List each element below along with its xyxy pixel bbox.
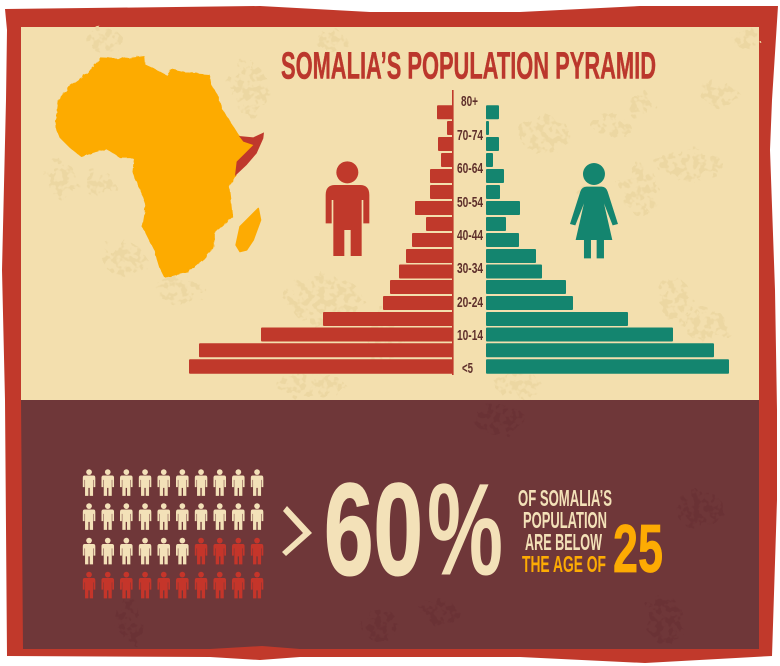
- pyramid: age labels: <5: [462, 361, 473, 377]
- pyramid: age labels: [457, 94, 483, 377]
- highlighted age: 25: 25: [613, 511, 663, 587]
- caption text: ARE BELOW: [525, 529, 602, 555]
- pyramid centre axis: [452, 90, 454, 375]
- dark maroon lower panel: [21, 400, 759, 649]
- pyramid: female bars: [486, 105, 729, 374]
- lower panel texture: [118, 406, 724, 644]
- Madagascar: [236, 208, 261, 252]
- Somalia: [235, 132, 264, 176]
- icon: male figure: [326, 161, 369, 256]
- Africa continent: [56, 57, 253, 277]
- pyramid: age labels: 30-34: [457, 261, 483, 277]
- caption text: OF SOMALIA’S: [518, 485, 612, 511]
- pictogram grid: red figures: [83, 538, 263, 598]
- pyramid: age labels: 20-24: [457, 295, 483, 311]
- big statistic: 60%: %: [427, 456, 503, 602]
- beige upper panel: [21, 27, 759, 401]
- pyramid: age labels: 50-54: [457, 195, 483, 211]
- big statistic: 60%: 60: [324, 456, 423, 602]
- icon: female figure: [570, 163, 618, 258]
- icon: greater-than chevron: [282, 506, 312, 556]
- pyramid: age labels: 70-74: [457, 128, 483, 144]
- paper texture blotches: [48, 26, 757, 399]
- pyramid: male bars: [189, 90, 454, 375]
- pyramid: age labels: 60-64: [457, 161, 483, 177]
- caption text: THE AGE OF: [522, 551, 606, 577]
- map: Africa with Somalia highlighted: [56, 57, 264, 277]
- pyramid: age labels: 10-14: [457, 328, 483, 344]
- caption text: [518, 485, 612, 577]
- caption text: POPULATION: [523, 507, 607, 533]
- pictogram grid: cream figures: [83, 469, 263, 564]
- pyramid: age labels: 80+: [461, 94, 478, 110]
- pyramid: age labels: 40-44: [457, 228, 483, 244]
